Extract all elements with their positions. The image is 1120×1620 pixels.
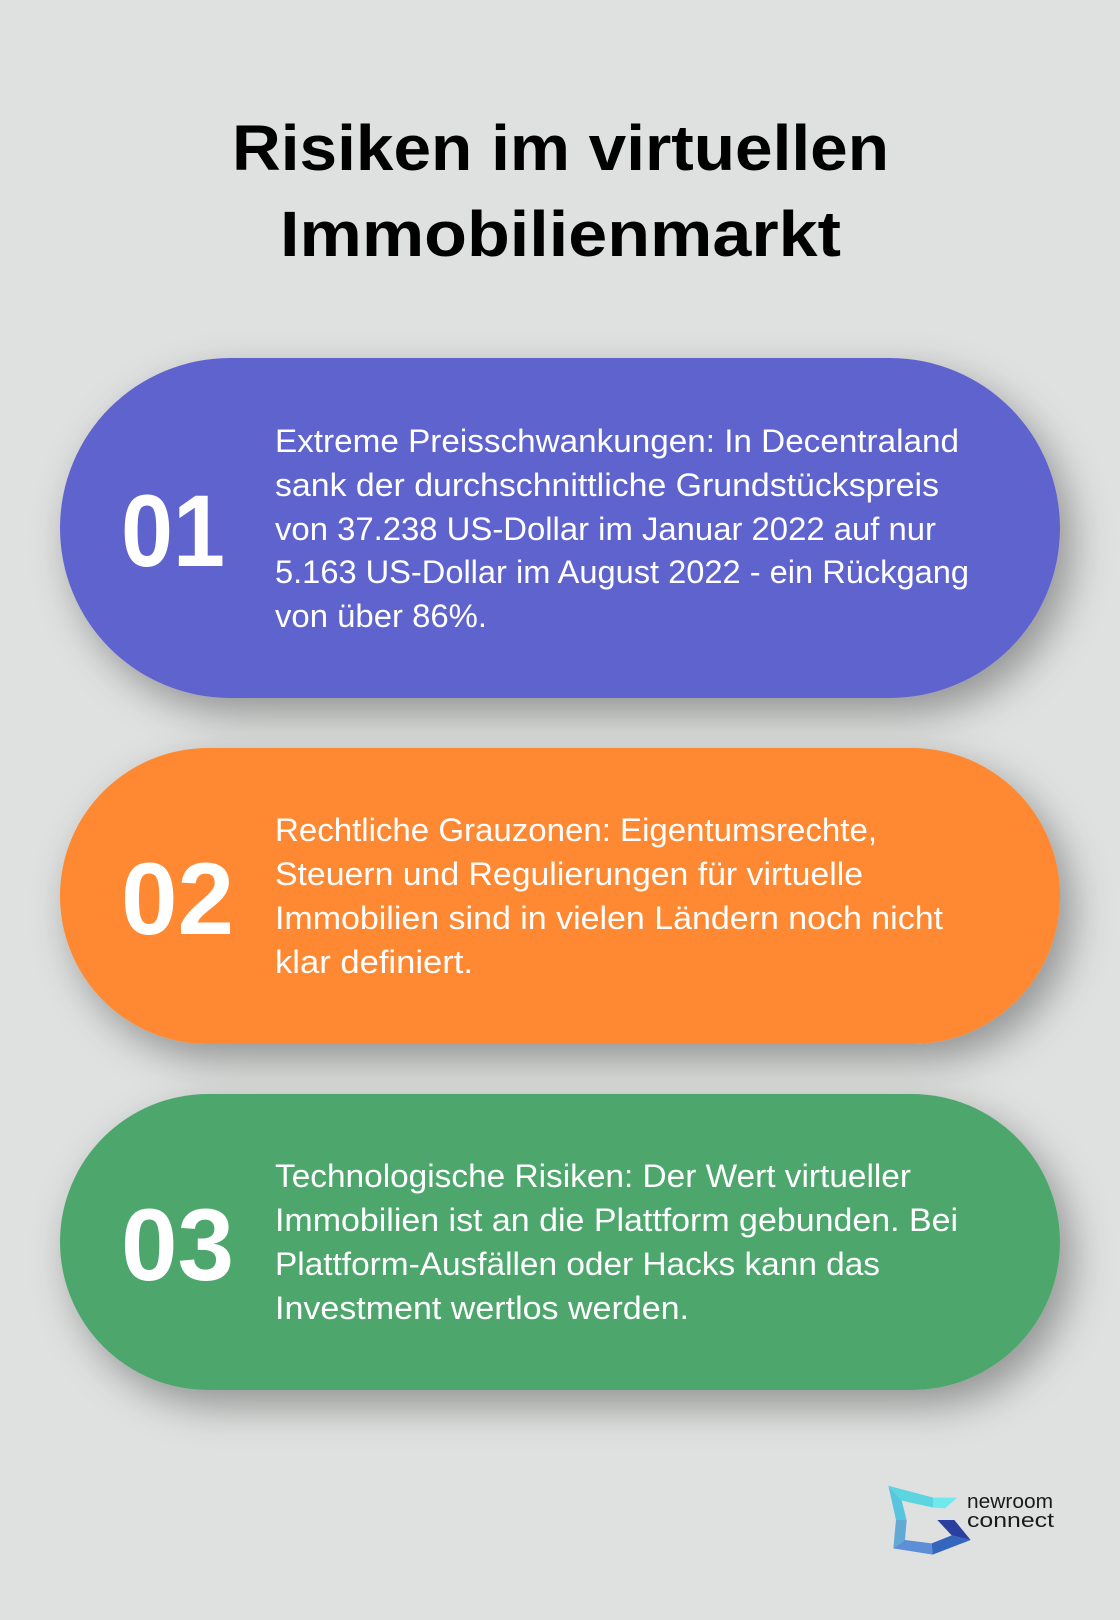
number 02: 02 bbox=[121, 842, 234, 956]
title: Risiken im virtuellen bbox=[232, 112, 889, 184]
text block 03: Immobilien ist an die Plattform gebunden. Bei bbox=[275, 1202, 958, 1238]
text block 01: sank der durchschnittliche Grundstückspreis bbox=[275, 467, 939, 503]
number 03: 03 bbox=[121, 1188, 234, 1302]
title bbox=[232, 112, 889, 270]
title: Immobilienmarkt bbox=[280, 198, 841, 270]
text block 03: Plattform-Ausfällen oder Hacks kann das bbox=[275, 1246, 880, 1282]
logo wordmark: connect bbox=[967, 1510, 1055, 1532]
text block 03: Investment wertlos werden. bbox=[275, 1290, 689, 1326]
text block 01: von über 86%. bbox=[275, 598, 487, 634]
text block 03 bbox=[275, 1158, 958, 1326]
icon: logo mark bbox=[888, 1486, 971, 1555]
text block 02: Immobilien sind in vielen Ländern noch nicht bbox=[275, 900, 943, 936]
logo wordmark bbox=[967, 1491, 1055, 1532]
text block 01: 5.163 US-Dollar im August 2022 - ein Rückgang bbox=[275, 554, 969, 590]
panel: risk 03 technological risks bbox=[60, 1094, 1060, 1390]
panel: risk 02 legal grey areas bbox=[60, 748, 1060, 1044]
text block 01 bbox=[275, 423, 969, 634]
text block 01: Extreme Preisschwankungen: In Decentraland bbox=[275, 423, 959, 459]
text block 01: von 37.238 US-Dollar im Januar 2022 auf nur bbox=[275, 511, 936, 547]
text block 03: Technologische Risiken: Der Wert virtueller bbox=[275, 1158, 911, 1194]
logo: newroom connect bbox=[888, 1486, 1055, 1555]
number 01: 01 bbox=[121, 474, 225, 588]
text block 02: Steuern und Regulierungen für virtuelle bbox=[275, 856, 863, 892]
logo wordmark: newroom bbox=[967, 1491, 1053, 1513]
panel: risk 01 price swings bbox=[60, 358, 1060, 698]
text block 02: klar definiert. bbox=[275, 944, 473, 980]
text block 02 bbox=[275, 812, 943, 980]
text block 02: Rechtliche Grauzonen: Eigentumsrechte, bbox=[275, 812, 877, 848]
